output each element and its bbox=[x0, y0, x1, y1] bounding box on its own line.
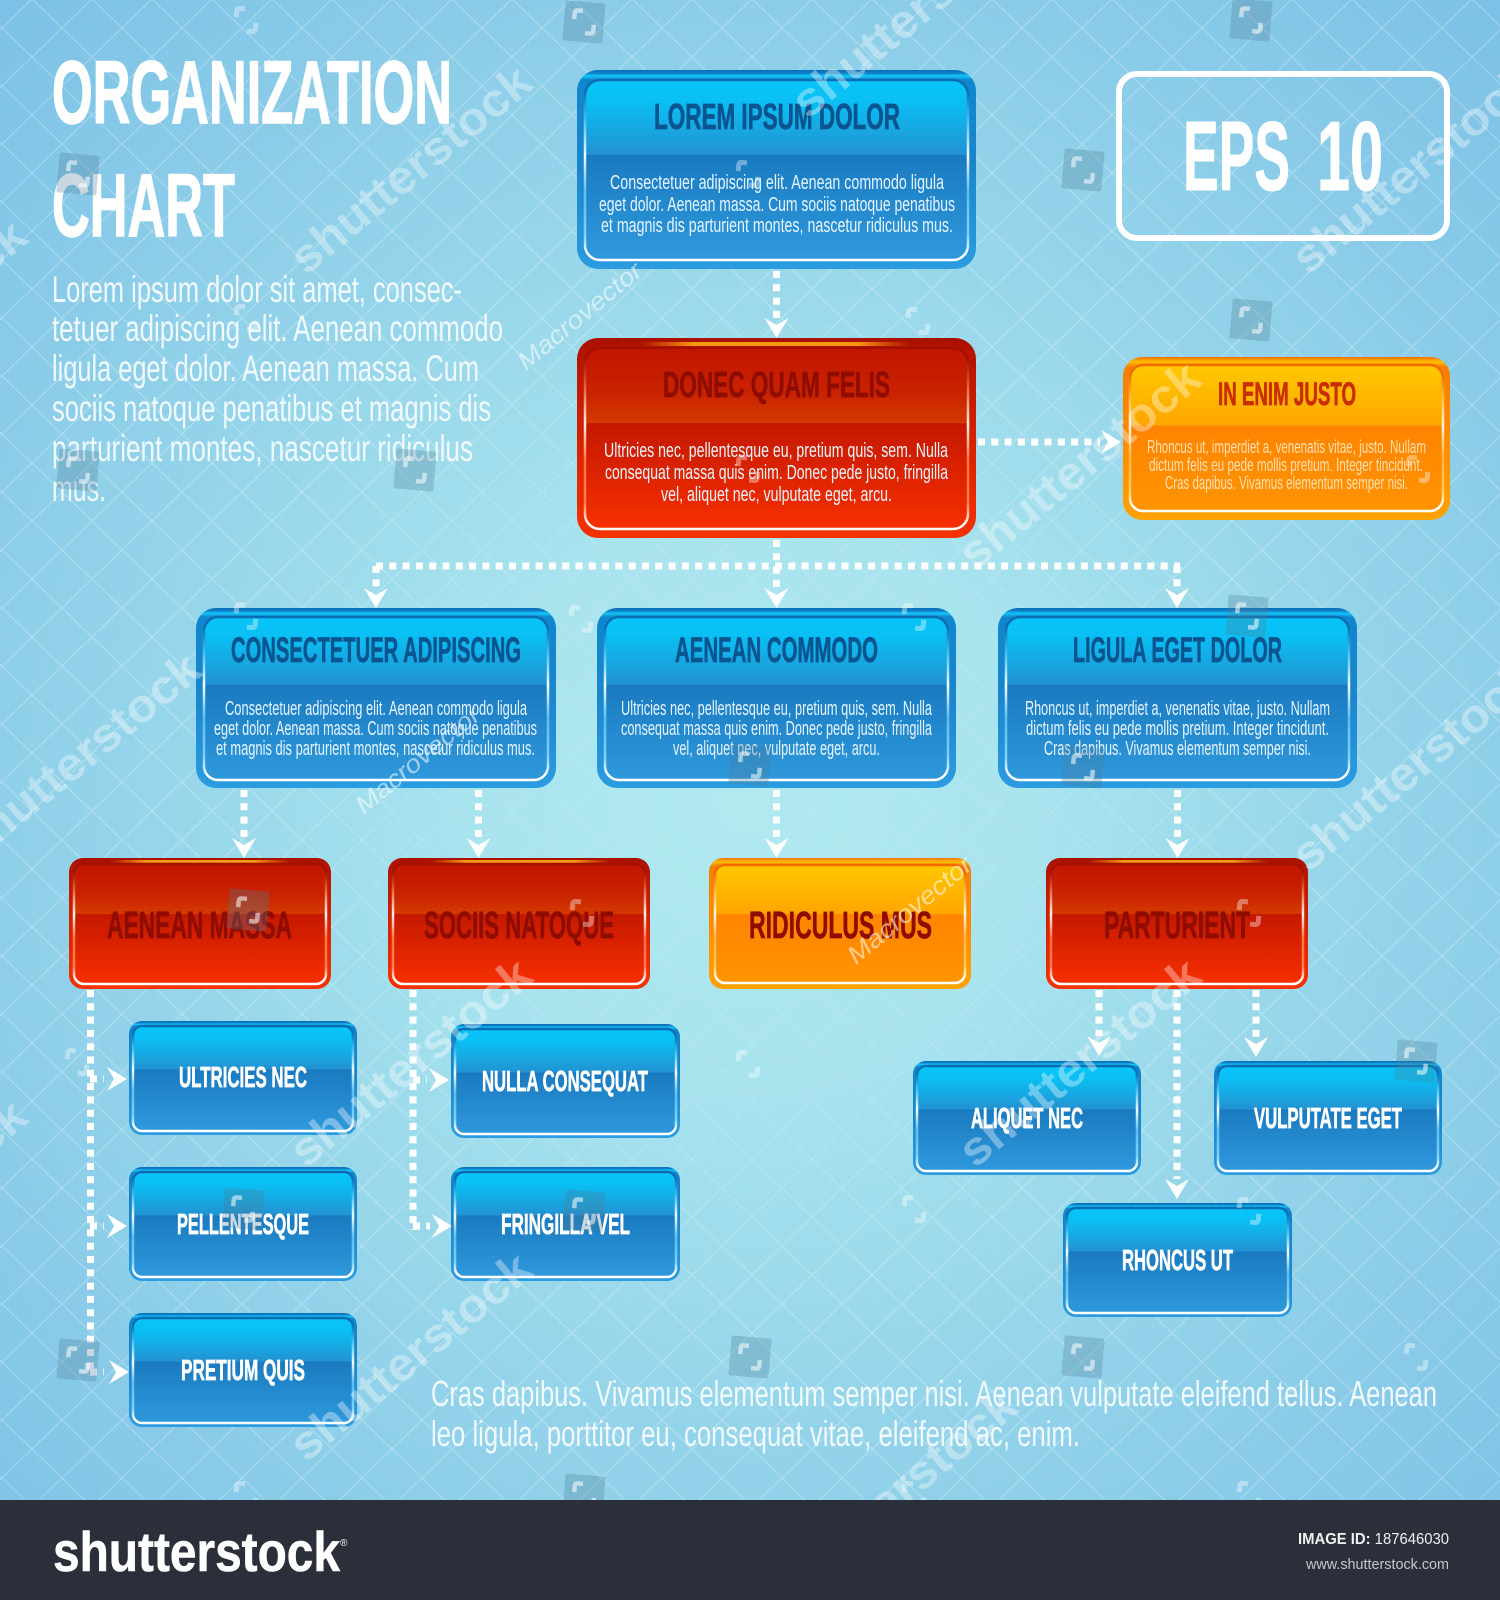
label: RIDICULUS MUS bbox=[749, 905, 932, 947]
shutterstock watermarks: shutterstock bbox=[279, 946, 542, 1177]
title: ORGANIZATION bbox=[52, 42, 452, 142]
body text: Consectetuer adipiscing elit. Aenean commodo ligula bbox=[610, 172, 945, 194]
body text: vel, aliquet nec, vulputate eget, arcu. bbox=[673, 738, 880, 760]
box: Aenean commodo bbox=[597, 608, 956, 788]
box: Pellentesque bbox=[129, 1167, 357, 1281]
box: Donec quam felis bbox=[577, 338, 976, 538]
shutterstock watermarks: shutterstock bbox=[948, 946, 1211, 1177]
shutterstock watermarks: shutterstock bbox=[948, 349, 1211, 580]
label: NULLA CONSEQUAT bbox=[482, 1066, 648, 1098]
body text: et magnis dis parturient montes, nascetur ridiculus mus. bbox=[216, 738, 535, 760]
connectors and arrows bbox=[90, 271, 1268, 1384]
body text bbox=[1147, 437, 1426, 493]
body text: Ultricies nec, pellentesque eu, pretium quis, sem. Nulla bbox=[621, 698, 933, 720]
intro paragraph: mus. bbox=[52, 468, 106, 509]
box: Lorem ipsum dolor bbox=[577, 70, 976, 269]
EPS 10 badge bbox=[1119, 74, 1447, 238]
body text: Ultricies nec, pellentesque eu, pretium quis, sem. Nulla bbox=[604, 440, 949, 462]
heading: DONEC QUAM FELIS bbox=[663, 364, 890, 405]
image id: IMAGE ID: 187646030 bbox=[1298, 1531, 1449, 1548]
box: Consectetuer adipiscing bbox=[196, 608, 556, 788]
website: www.shutterstock.com bbox=[1305, 1556, 1449, 1573]
title bbox=[52, 42, 452, 255]
shutterstock watermarks: shutterstock bbox=[279, 53, 542, 284]
body text: vel, aliquet nec, vulputate eget, arcu. bbox=[661, 484, 892, 506]
heading: CONSECTETUER ADIPISCING bbox=[231, 631, 521, 670]
intro paragraph: parturient montes, nascetur ridiculus bbox=[52, 428, 473, 469]
box: Sociis natoque bbox=[388, 858, 650, 989]
footer logo: shutterstock bbox=[53, 1520, 341, 1583]
label: ULTRICIES NEC bbox=[179, 1062, 307, 1094]
closing paragraph: leo ligula, porttitor eu, consequat vitae, eleifend ac, enim. bbox=[431, 1413, 1080, 1454]
body text bbox=[621, 698, 933, 760]
closing paragraph bbox=[431, 1373, 1437, 1454]
box: Nulla consequat bbox=[451, 1024, 680, 1138]
box: Ridiculus mus bbox=[709, 858, 971, 989]
label: PARTURIENT bbox=[1104, 905, 1250, 947]
body text: consequat massa quis enim. Donec pede justo, fringilla bbox=[621, 718, 933, 740]
intro paragraph bbox=[52, 269, 503, 509]
label: PRETIUM QUIS bbox=[181, 1355, 305, 1387]
box: Pretium quis bbox=[129, 1313, 357, 1427]
box: Aenean massa bbox=[69, 858, 331, 989]
box: Parturient bbox=[1046, 858, 1308, 989]
box: Ligula eget dolor bbox=[998, 608, 1357, 788]
box: Rhoncus ut bbox=[1063, 1203, 1292, 1317]
box: Fringilla vel bbox=[451, 1167, 680, 1281]
footer bar bbox=[0, 1500, 1500, 1600]
label: PELLENTESQUE bbox=[177, 1209, 309, 1241]
heading: LIGULA EGET DOLOR bbox=[1073, 631, 1282, 670]
body text bbox=[214, 698, 537, 760]
label: ALIQUET NEC bbox=[971, 1103, 1083, 1135]
heading: LOREM IPSUM DOLOR bbox=[654, 96, 900, 137]
heading: IN ENIM JUSTO bbox=[1218, 376, 1356, 412]
body text: Rhoncus ut, imperdiet a, venenatis vitae, justo. Nullam bbox=[1025, 698, 1330, 720]
body text: eget dolor. Aenean massa. Cum sociis natoque penatibus bbox=[214, 718, 537, 740]
intro paragraph: ligula eget dolor. Aenean massa. Cum bbox=[52, 348, 479, 389]
body text bbox=[604, 440, 949, 506]
box: Ultricies nec bbox=[129, 1021, 357, 1135]
body text: consequat massa quis enim. Donec pede justo, fringilla bbox=[605, 462, 949, 484]
body text: eget dolor. Aenean massa. Cum sociis natoque penatibus bbox=[599, 194, 955, 216]
label: FRINGILLA VEL bbox=[501, 1209, 630, 1241]
shutterstock watermarks: shutterstock bbox=[279, 1240, 542, 1471]
registered mark: ® bbox=[340, 1538, 348, 1549]
body text: Cras dapibus. Vivamus elementum semper nisi. bbox=[1044, 738, 1311, 760]
intro paragraph: tetuer adipiscing elit. Aenean commodo bbox=[52, 308, 503, 349]
body text bbox=[1025, 698, 1330, 760]
macrovector watermarks bbox=[350, 256, 979, 970]
EPS 10 badge: EPS bbox=[1183, 101, 1290, 211]
label: SOCIIS NATOQUE bbox=[424, 905, 614, 947]
label: RHONCUS UT bbox=[1122, 1245, 1233, 1277]
macrovector watermarks: Macrovector bbox=[350, 700, 487, 820]
body text bbox=[599, 172, 955, 237]
body text: Consectetuer adipiscing elit. Aenean commodo ligula bbox=[225, 698, 528, 720]
label: AENEAN MASSA bbox=[107, 905, 292, 947]
heading: AENEAN COMMODO bbox=[675, 631, 878, 670]
box: Aliquet nec bbox=[913, 1061, 1141, 1175]
box: Vulputate eget bbox=[1214, 1061, 1442, 1175]
intro paragraph: Lorem ipsum dolor sit amet, consec- bbox=[52, 269, 462, 310]
box: In enim justo bbox=[1123, 357, 1450, 520]
body text: dictum felis eu pede mollis pretium. Integer tincidunt. bbox=[1026, 718, 1329, 740]
intro paragraph: sociis natoque penatibus et magnis dis bbox=[52, 388, 491, 429]
macrovector watermarks: Macrovector bbox=[512, 256, 649, 376]
title: CHART bbox=[52, 155, 235, 255]
EPS 10 badge: 10 bbox=[1317, 101, 1383, 211]
body text: et magnis dis parturient montes, nascetur ridiculus mus. bbox=[601, 215, 953, 237]
macrovector watermarks: Macrovector bbox=[842, 850, 979, 970]
